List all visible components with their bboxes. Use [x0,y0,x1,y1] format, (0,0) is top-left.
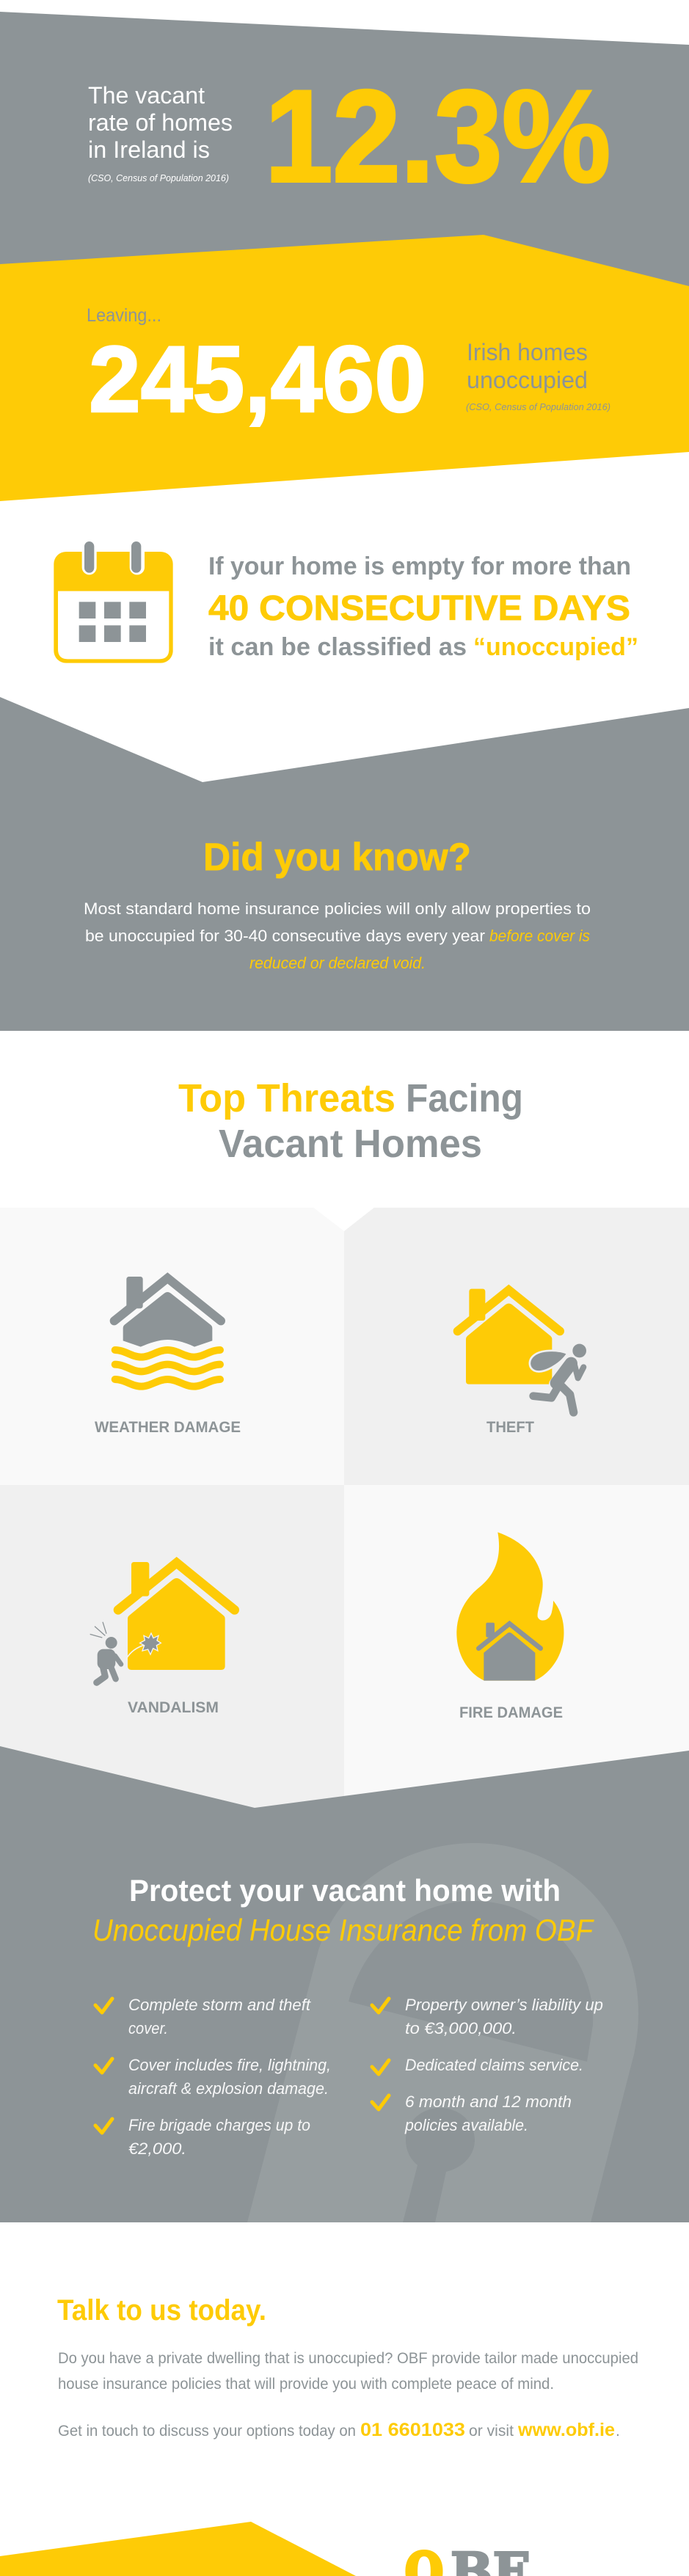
did you know body: be unoccupied for 30-40 consecutive days every year [85,927,485,945]
logo: OBF [405,2541,528,2576]
check list: left column: cover. [128,2019,168,2037]
icon: vandalism [90,1562,235,1682]
vacant rate intro text: The vacant [88,82,205,109]
irish homes text: unoccupied [467,367,588,393]
protect subheading: Unoccupied House Insurance from OBF [92,1913,594,1947]
heading: top threats [178,1076,523,1166]
vacant rate intro text [88,82,233,163]
check list: right column: to €3,000,000. [405,2019,517,2037]
check list: right column: 6 month and 12 month [405,2092,572,2111]
leaving label: Leaving... [87,305,161,326]
did you know body: Most standard home insurance policies will only allow properties to [84,900,591,918]
icon: fire [456,1532,564,1681]
icon: flooded house [114,1277,221,1387]
text block: contact [58,2350,638,2440]
text block: contact: house insurance policies that will provide you with complete peace of mind. [58,2376,554,2393]
label: vandalism: VANDALISM [128,1699,219,1716]
check list: right column [404,1996,603,2134]
did you know body [84,900,591,972]
irish homes text: Irish homes [467,339,588,365]
text block: 40 consecutive days: If your home is empty for more than [208,552,631,580]
label: theft: THEFT [486,1419,534,1436]
big stat: 245,460: 245,460 [89,327,426,432]
panel: homes unoccupied [0,235,689,501]
check list: right column: policies available. [404,2116,528,2134]
threat panels background [0,1207,689,1822]
check list: left column: Complete storm and theft [128,1996,311,2014]
heading: top threats: Top Threats [178,1076,395,1120]
check list: left column: Cover includes fire, lightning, [128,2056,331,2074]
check list: left column: €2,000. [128,2139,186,2158]
vacant rate intro text: rate of homes [88,109,233,136]
source note: (CSO, Census of Population 2016) [466,401,610,412]
vacant rate intro text: in Ireland is [88,136,210,163]
text block: contact: . [616,2423,620,2440]
did you know body: before cover is [489,927,590,945]
panel: vacant rate [0,12,689,308]
check list: left column: aircraft & explosion damage. [128,2079,329,2098]
text block: contact: or visit [469,2423,514,2440]
heading: talk to us: Talk to us today. [57,2294,266,2327]
protect heading: Protect your vacant home with [129,1873,561,1908]
text block: contact: 01 6601033 [360,2420,465,2440]
panel: protect your vacant home [0,1746,689,2222]
panel: did you know [0,697,689,1031]
text block: contact: Get in touch to discuss your options today on [58,2423,356,2440]
check list: right column: Property owner’s liability up [405,1996,603,2014]
heading: top threats: Vacant Homes [219,1122,482,1166]
source note: (CSO, Census of Population 2016) [88,172,229,183]
label: weather damage: WEATHER DAMAGE [95,1419,241,1436]
text block: 40 consecutive days [208,552,638,661]
text block: contact: www.obf.ie [517,2420,615,2440]
did you know body: reduced or declared void. [249,954,426,972]
text block: 40 consecutive days: 40 CONSECUTIVE DAYS [208,589,630,628]
heading: top threats: Facing [406,1076,523,1120]
padlock keyhole [403,2108,475,2222]
icon: calendar [54,541,173,663]
big stat: 12.3%: 12.3% [265,63,610,209]
check list: left column: Fire brigade charges up to [128,2116,310,2134]
label: fire damage: FIRE DAMAGE [459,1704,563,1721]
did you know heading: Did you know? [203,836,471,879]
text block: contact: Do you have a private dwelling that is unoccupied? OBF provide tailor made unoccupied [58,2350,638,2367]
footer yellow shape [0,2522,356,2576]
padlock watermark [247,1843,638,2222]
check list: left column [128,1996,331,2158]
check list: right column: Dedicated claims service. [405,2056,583,2074]
icon: theft [458,1289,586,1412]
text block: 40 consecutive days: “unoccupied” [473,633,638,661]
text block: 40 consecutive days: it can be classified as [208,633,467,661]
irish homes text [467,339,588,393]
check icons [95,1999,389,2133]
